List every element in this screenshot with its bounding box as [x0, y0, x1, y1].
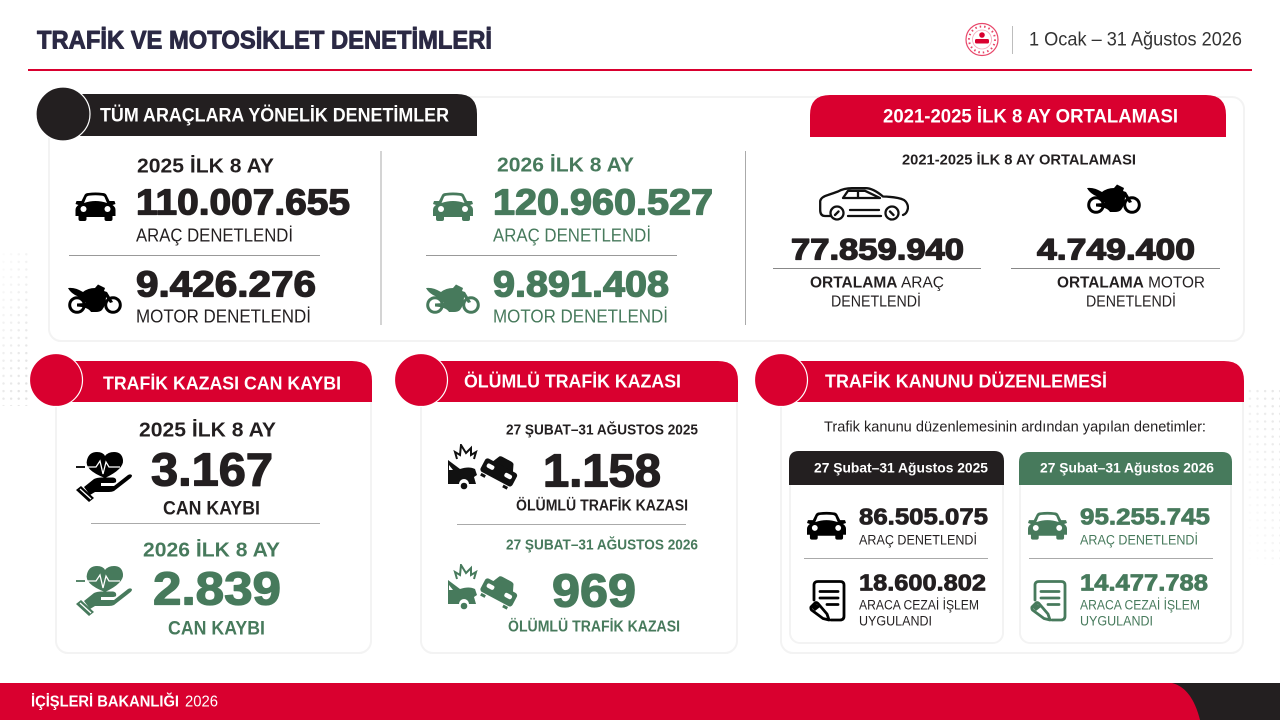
- panel: traffic accident deaths: CAN KAYBI: [168, 618, 265, 639]
- icon: motorcycle average: [1087, 184, 1139, 212]
- heading: traffic law regulation: TRAFİK KANUNU DÜZENLEMESİ: [825, 370, 1107, 391]
- icon: document with pen: [811, 582, 844, 620]
- fatal accidents 2025: 1.158: [543, 444, 661, 496]
- column: 2021-2025 average: DENETLENDİ: [1086, 291, 1176, 310]
- card: 2025 period: [789, 451, 1004, 643]
- icon: heart in hand: [76, 452, 132, 502]
- panel: all vehicle inspections: [36, 87, 1244, 341]
- title: TRAFİK VE MOTOSİKLET DENETİMLERİ: [37, 26, 492, 54]
- panel: traffic accident deaths: CAN KAYBI: [163, 498, 260, 519]
- icon: ministry emblem: [966, 24, 998, 56]
- heading: 2021-2025 average: [810, 95, 1226, 137]
- card: 2026 period: 27 Şubat–31 Ağustos 2026: [1040, 460, 1215, 475]
- footer: 2026: [185, 693, 218, 710]
- column: 2025 first 8 months: [68, 154, 350, 326]
- card: 2026 period: [1019, 452, 1232, 643]
- average motorcycles: 4.749.400: [1037, 233, 1195, 266]
- column: 2021-2025 average: [773, 151, 1220, 310]
- column: 2026 first 8 months: MOTOR DENETLENDİ: [493, 306, 668, 326]
- panel: traffic accident deaths: 2025 İLK 8 AY: [139, 418, 277, 441]
- column: 2025 first 8 months: 2025 İLK 8 AY: [137, 154, 275, 177]
- average vehicles: 77.859.940: [791, 233, 964, 266]
- heading: traffic law regulation: [754, 354, 1244, 406]
- card: 2026 period: ARAÇ DENETLENDİ: [1080, 532, 1198, 547]
- column: 2026 first 8 months: ARAÇ DENETLENDİ: [493, 225, 651, 245]
- footer: [0, 683, 1280, 720]
- panel: traffic law regulation: [754, 354, 1244, 653]
- motorcycles inspected 2025: 9.426.276: [136, 263, 316, 304]
- icon: sedan outline: [820, 188, 908, 220]
- card: 2026 period: ARACA CEZAİ İŞLEM: [1080, 597, 1200, 612]
- penalties applied: 14.477.788: [1080, 569, 1208, 595]
- column: 2021-2025 average: 2021-2025 İLK 8 AY ORTALAMASI: [902, 151, 1136, 168]
- background dot pattern: [0, 250, 1280, 565]
- panel: fatal traffic accidents: 27 ŞUBAT–31 AĞUSTOS 2026: [506, 535, 698, 553]
- date range: 1 Ocak – 31 Ağustos 2026: [1029, 28, 1242, 50]
- icon: car: [76, 192, 116, 221]
- column: 2026 first 8 months: [426, 153, 713, 326]
- heading: all vehicle inspections: TÜM ARAÇLARA YÖNELİK DENETİMLER: [100, 103, 449, 126]
- column: 2026 first 8 months: 2026 İLK 8 AY: [497, 153, 635, 176]
- panel: fatal traffic accidents: [394, 354, 738, 653]
- card: 2025 period: ARAÇ DENETLENDİ: [859, 532, 977, 547]
- panel: traffic accident deaths: [30, 354, 372, 653]
- card: 2025 period: ARACA CEZAİ İŞLEM: [859, 597, 979, 612]
- deaths 2025: 3.167: [151, 443, 273, 495]
- deaths 2026: 2.839: [153, 562, 281, 614]
- penalties applied: 18.600.802: [859, 569, 986, 595]
- motorcycles inspected 2026: 9.891.408: [493, 263, 669, 304]
- card: 2026 period: UYGULANDI: [1080, 613, 1153, 628]
- icon: car: [807, 512, 846, 540]
- average motorcycles label: ORTALAMA MOTOR: [1057, 274, 1205, 291]
- column: 2025 first 8 months: MOTOR DENETLENDİ: [136, 306, 311, 326]
- column: 2021-2025 average: DENETLENDİ: [831, 291, 921, 310]
- icon: document with pen green: [1032, 582, 1065, 620]
- vehicles inspected: 86.505.075: [859, 503, 988, 529]
- icon: motorcycle green: [426, 284, 478, 312]
- heading: fatal traffic accidents: ÖLÜMLÜ TRAFİK KAZASI: [464, 370, 681, 391]
- heading: traffic accident deaths: TRAFİK KAZASI CAN KAYBI: [103, 372, 341, 393]
- heading: all vehicle inspections: [36, 87, 477, 141]
- column: 2025 first 8 months: ARAÇ DENETLENDİ: [136, 225, 293, 245]
- heading: fatal traffic accidents: [394, 354, 738, 406]
- panel: fatal traffic accidents: ÖLÜMLÜ TRAFİK KAZASI: [516, 497, 688, 514]
- icon: motorcycle: [68, 284, 120, 312]
- vehicles inspected 2026: 120.960.527: [493, 181, 713, 222]
- fatal accidents 2026: 969: [552, 564, 636, 616]
- icon: car crash green: [448, 565, 522, 611]
- panel: traffic accident deaths: 2026 İLK 8 AY: [143, 538, 281, 561]
- intro text: Trafik kanunu düzenlemesinin ardından yapılan denetimler:: [824, 419, 1206, 435]
- icon: car green: [433, 192, 473, 221]
- vehicles inspected 2025: 110.007.655: [136, 181, 350, 222]
- panel: fatal traffic accidents: ÖLÜMLÜ TRAFİK KAZASI: [508, 618, 680, 635]
- icon: car green: [1028, 512, 1067, 540]
- icon: heart in hand green: [76, 566, 132, 616]
- heading: 2021-2025 average: 2021-2025 İLK 8 AY ORTALAMASI: [883, 106, 1178, 127]
- footer: İÇİŞLERİ BAKANLIĞI: [31, 691, 179, 710]
- card: 2025 period: 27 Şubat–31 Ağustos 2025: [814, 460, 989, 475]
- heading: traffic accident deaths: [30, 354, 372, 406]
- average vehicles label: ORTALAMA ARAÇ: [810, 274, 944, 291]
- vehicles inspected: 95.255.745: [1080, 503, 1210, 529]
- panel: fatal traffic accidents: 27 ŞUBAT–31 AĞUSTOS 2025: [506, 420, 698, 438]
- card: 2025 period: UYGULANDI: [859, 613, 932, 628]
- icon: car crash: [448, 445, 522, 491]
